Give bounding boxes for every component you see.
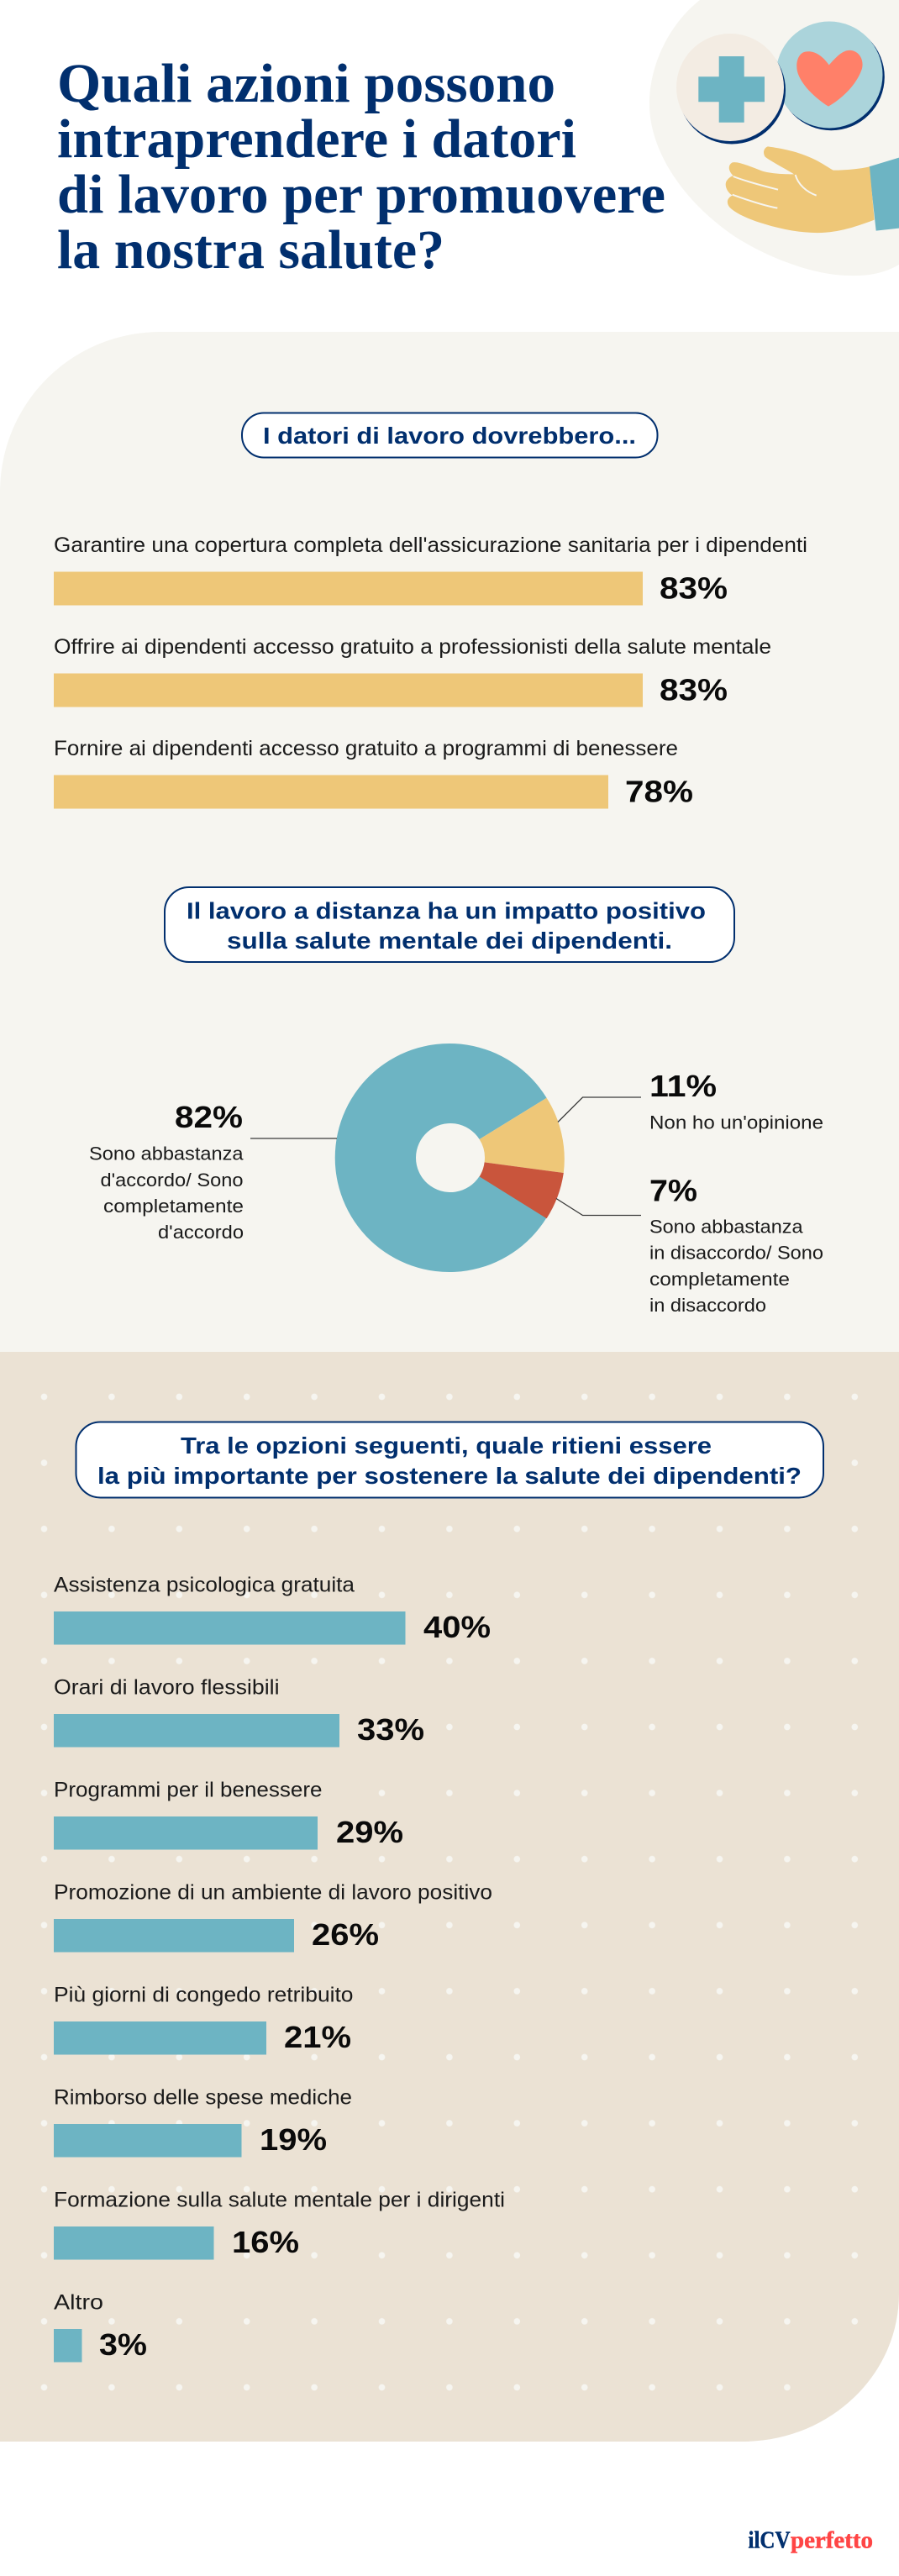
callout: 7% disagree: [556, 1173, 823, 1316]
bar: paid leave: Più giorni di congedo retribuito: [54, 1983, 353, 2006]
slice: disagree 7%: [480, 1162, 564, 1218]
title: di lavoro per promuovere: [57, 164, 665, 225]
callout: 7% disagree: Sono abbastanza: [649, 1217, 803, 1237]
bar: flexible hours: [54, 1675, 424, 1748]
bar chart: most important options: [54, 1573, 505, 2363]
heading pill: employers should: I datori di lavoro dovrebbero...: [263, 423, 636, 449]
bar: free counselling: Assistenza psicologica gratuita: [54, 1573, 355, 1596]
dotted pattern: [34, 1386, 865, 2399]
callout: 82% agree: [89, 1100, 337, 1243]
icon: medical cross circle: [676, 34, 786, 145]
bar: manager training: [54, 2188, 505, 2260]
bar: wellness programs: 78%: [625, 775, 693, 809]
callout: 11% no opinion: Non ho un'opinione: [649, 1112, 823, 1133]
bar: positive environment: 26%: [312, 1917, 379, 1952]
heading pill: most important option: Tra le opzioni seguenti, quale ritieni essere: [181, 1433, 712, 1459]
panel: light survey background: [0, 332, 899, 1352]
bar: manager training: Formazione sulla salute mentale per i dirigenti: [54, 2188, 505, 2211]
callout: 7% disagree: 7%: [649, 1173, 697, 1208]
bar: health insurance: 83%: [660, 571, 728, 606]
title: [57, 53, 665, 281]
heading pill: remote work: sulla salute mentale dei dipendenti.: [227, 928, 672, 954]
bar: mental health professionals: Offrire ai dipendenti accesso gratuito a professionisti della salute mentale: [54, 635, 771, 659]
bar: medical reimbursement: Rimborso delle spese mediche: [54, 2085, 352, 2109]
logo: [748, 2528, 873, 2554]
bar: free counselling: 40%: [423, 1610, 491, 1644]
bar: mental health professionals: [54, 635, 771, 707]
bar: wellness programs: Programmi per il benessere: [54, 1778, 323, 1801]
blob background: [649, 0, 899, 276]
bar: flexible hours: 33%: [357, 1712, 424, 1747]
callout: 7% disagree: in disaccordo/ Sono: [649, 1242, 823, 1264]
bar: paid leave: [54, 1983, 353, 2055]
callout: 82% agree: Sono abbastanza: [89, 1143, 244, 1164]
title: Quali azioni possono: [57, 53, 555, 114]
heading pill: most important option: la più importante per sostenere la salute dei dipendenti?: [97, 1463, 802, 1489]
bar: health insurance: [54, 534, 807, 606]
callout: 82% agree: d'accordo/ Sono: [101, 1170, 244, 1191]
callout: 7% disagree: in disaccordo: [649, 1295, 766, 1316]
title: intraprendere i datori: [57, 108, 576, 170]
bar: other: [54, 2290, 147, 2363]
bar: paid leave: 21%: [284, 2020, 351, 2054]
callout: 11% no opinion: [558, 1069, 823, 1133]
heading pill: most important option: [76, 1422, 823, 1497]
logo: perfetto: [791, 2528, 873, 2554]
bar: other: Altro: [54, 2290, 103, 2314]
bar: other: 3%: [99, 2327, 147, 2362]
bar: wellness programs: Fornire ai dipendenti accesso gratuito a programmi di benessere: [54, 737, 678, 760]
slice: no opinion 11%: [480, 1098, 565, 1173]
bar: positive environment: [54, 1880, 492, 1953]
bar: free counselling: [54, 1573, 491, 1645]
bar: wellness programs: 29%: [336, 1815, 403, 1849]
callout: 82% agree: d'accordo: [158, 1222, 244, 1243]
callout: 11% no opinion: 11%: [649, 1069, 717, 1103]
bar: medical reimbursement: [54, 2085, 352, 2158]
title: la nostra salute?: [57, 219, 444, 281]
heading pill: remote work: [165, 887, 734, 962]
slice: agree 82%: [335, 1044, 547, 1272]
bar: mental health professionals: 83%: [660, 673, 728, 707]
bar: wellness programs: [54, 737, 693, 809]
heading pill: employers should: [242, 413, 657, 457]
callout: 7% disagree: completamente: [649, 1269, 790, 1290]
icon: heart circle: [776, 22, 885, 130]
bar chart: employers should: [54, 534, 807, 809]
heading pill: remote work: Il lavoro a distanza ha un impatto positivo: [187, 897, 706, 924]
callout: 82% agree: completamente: [103, 1196, 244, 1217]
bar: health insurance: Garantire una copertura completa dell'assicurazione sanitaria per i dipendenti: [54, 534, 807, 557]
icon: hand with health symbols: [649, 0, 899, 276]
panel: beige options background: [0, 1352, 899, 2442]
icon: hand: [726, 146, 899, 233]
bar: flexible hours: Orari di lavoro flessibili: [54, 1675, 279, 1699]
bar: positive environment: Promozione di un ambiente di lavoro positivo: [54, 1880, 492, 1904]
bar: wellness programs: [54, 1778, 403, 1850]
bar: medical reimbursement: 19%: [260, 2122, 327, 2157]
bar: manager training: 16%: [232, 2225, 299, 2259]
donut chart: remote work: [335, 1044, 565, 1272]
logo: ilCV: [748, 2528, 790, 2554]
callout: 82% agree: 82%: [175, 1100, 243, 1134]
